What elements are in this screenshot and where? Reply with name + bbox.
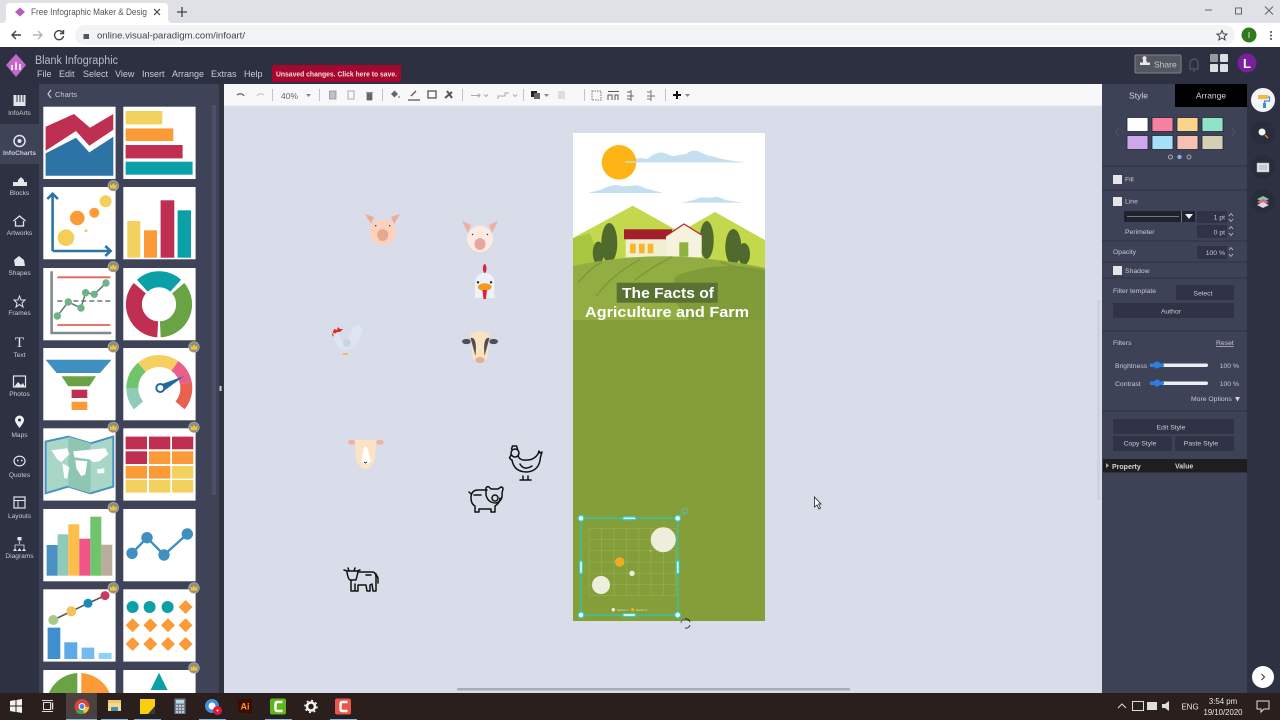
filter template controls: [1113, 285, 1234, 318]
filter sliders: [1113, 340, 1240, 403]
menu bar: [37, 69, 263, 79]
rail item: Frames: [8, 296, 31, 317]
right side rail: [1247, 84, 1280, 693]
style and arrange tabs: Style: [1129, 90, 1148, 100]
lock icon: [84, 34, 89, 39]
style tool button: [1251, 88, 1275, 112]
chart templates panel: [39, 84, 224, 706]
thumbnail: multicolour bars: [43, 509, 116, 581]
canvas background: [224, 106, 1102, 693]
taskbar: camtasia red: [335, 698, 351, 714]
browser address bar: [0, 23, 1280, 47]
title: The Facts of: [622, 285, 715, 302]
new tab button: [177, 7, 187, 17]
line control: Perimeter: [1125, 229, 1155, 236]
rail item: Blocks: Blocks: [10, 190, 30, 197]
rail item: Artworks: [7, 216, 33, 237]
url text: online.visual-paradigm.com/infoart/: [97, 30, 245, 40]
taskbar: settings: [305, 700, 317, 712]
icon: cow outline: [344, 568, 378, 591]
taskbar: vpn app: [205, 699, 222, 715]
rail item: Text: T: [15, 335, 24, 351]
style action buttons: Paste Style: [1184, 440, 1218, 448]
rail item: InfoCharts: [3, 136, 36, 157]
thumbnail: donut chart: [123, 268, 196, 340]
filter sliders: Contrast: [1115, 381, 1141, 388]
taskbar: sticky notes: [140, 699, 155, 714]
menu bar: File: [37, 69, 52, 79]
taskbar: illustrator: [238, 699, 252, 713]
rail item: Maps: [11, 416, 28, 439]
left icon rail: [0, 84, 39, 693]
premium crown badges: [108, 180, 199, 673]
filter sliders: Filters: [1113, 340, 1132, 347]
panel heading: Charts: [55, 90, 77, 99]
editor toolbar: [224, 84, 1102, 106]
thumbnail: gauge chart: [123, 348, 196, 420]
shadow control: [1113, 266, 1150, 275]
taskbar: task view: [42, 700, 53, 712]
bookmark star: [1217, 30, 1227, 40]
property table header: Value: [1175, 464, 1193, 470]
icon: rooster: [332, 325, 363, 354]
chart bubbles: [592, 527, 676, 594]
taskbar: calculator: [174, 698, 186, 714]
taskbar: camtasia green: [270, 698, 286, 714]
fill control: Fill: [1125, 176, 1134, 184]
rail item: Layouts: Layouts: [8, 513, 32, 520]
rail item: Diagrams: [5, 537, 34, 560]
collapse button: [1252, 666, 1274, 688]
chart legend: Series 1: [617, 608, 628, 612]
title: [585, 283, 749, 321]
line control: 0 pt: [1214, 230, 1225, 236]
icon: pig outline: [469, 487, 503, 512]
taskbar: open app indicators: [66, 718, 357, 720]
rail item: Quotes: [9, 456, 31, 479]
title: Agriculture and Farm: [585, 304, 749, 321]
document title: Blank Infographic: [35, 55, 118, 67]
add button: [673, 91, 681, 99]
shadow control: Shadow: [1125, 268, 1150, 275]
thumbnail: horizontal bars: [123, 107, 196, 179]
rail item: Text: Text: [13, 352, 26, 359]
back forward reload buttons: [12, 30, 64, 40]
style action buttons: [1113, 419, 1234, 451]
browser tab strip: [0, 0, 1280, 23]
thumbnail: line chart: [123, 509, 196, 581]
chart legend: Series 2: [636, 608, 647, 612]
canvas scrollbars: [457, 300, 1100, 690]
properties panel: [1102, 84, 1247, 693]
arrange icons: [531, 90, 655, 101]
fill control: [1113, 175, 1134, 184]
rail item: Quotes: Quotes: [9, 472, 31, 479]
system tray: 19/10/2020: [1203, 708, 1243, 717]
rail item: Photos: [9, 376, 30, 398]
thumbnail: scatter plot: [43, 187, 116, 259]
property table header: Property: [1112, 464, 1141, 471]
thumbnail: funnel chart: [43, 348, 116, 420]
apps grid: [1210, 54, 1228, 72]
share button: Share: [1154, 60, 1177, 70]
menu bar: Help: [244, 69, 263, 79]
app logo: [6, 54, 26, 77]
chart legend: [612, 608, 647, 612]
opacity control: 100 %: [1206, 250, 1225, 257]
windows taskbar: [0, 693, 1280, 720]
rail item: Frames: Frames: [8, 310, 31, 317]
search tool button: [1251, 121, 1275, 145]
thumbnail: column chart: [123, 187, 196, 259]
farmhouse: [624, 224, 702, 257]
filter sliders: More Options: [1191, 396, 1232, 403]
filter template controls: Select: [1194, 290, 1213, 298]
thumbnail: line over bars: [43, 589, 116, 662]
opacity control: [1113, 246, 1233, 259]
menu bar: Extras: [211, 69, 237, 79]
menu bar: Select: [83, 69, 109, 79]
chrome menu dots: [1270, 31, 1272, 40]
taskbar: file explorer: [108, 700, 121, 711]
selection box: [578, 508, 688, 618]
rail item: Photos: Photos: [9, 391, 30, 398]
user avatar: L: [1243, 56, 1251, 71]
thumbnail: area chart: [43, 107, 116, 179]
menu bar: Edit: [59, 69, 75, 79]
icon: chicken outline: [510, 446, 542, 480]
thumbnail: table heatmap: [123, 428, 196, 501]
filter sliders: 100 %: [1220, 381, 1239, 388]
notification bell: [1190, 59, 1198, 71]
line control: [1113, 197, 1233, 238]
menu bar: Insert: [142, 69, 165, 79]
style action buttons: Edit Style: [1157, 424, 1186, 432]
rail item: Shapes: Shapes: [8, 270, 31, 277]
icon: pig face: [365, 214, 400, 245]
style and arrange tabs: Arrange: [1196, 90, 1226, 100]
chart gridlines: [589, 528, 676, 596]
rail item: Blocks: [10, 177, 30, 197]
share button: [1135, 55, 1181, 73]
rail item: Text: [13, 335, 26, 359]
line control: Line: [1125, 198, 1138, 206]
style action buttons: Copy Style: [1124, 440, 1157, 448]
user avatar: [1238, 54, 1256, 72]
trees: [593, 221, 750, 265]
icon: sheep face: [348, 440, 384, 469]
connector icons: [471, 93, 517, 99]
zoom level: 40%: [281, 91, 298, 101]
rail item: Maps: Maps: [11, 432, 28, 439]
rail item: Layouts: [8, 497, 32, 520]
system tray: 3:54 pm: [1209, 697, 1237, 706]
colour swatches: [1127, 118, 1223, 150]
unsaved changes button: [272, 65, 401, 82]
browser tab: [2, 3, 172, 23]
window controls: [1205, 6, 1273, 14]
style icons: [391, 90, 452, 100]
profile avatar: [1242, 28, 1256, 42]
rail item: InfoArts: [8, 95, 32, 117]
profile avatar: I: [1248, 31, 1250, 40]
layers tool button: [1251, 189, 1275, 213]
browser tab: Free Infographic Maker & Desig: [31, 7, 147, 17]
filter sliders: Brightness: [1115, 363, 1148, 370]
page tool button: [1251, 155, 1275, 179]
swatch pager: [1116, 128, 1235, 159]
unsaved changes button: Unsaved changes. Click here to save.: [276, 70, 397, 78]
page and delete icons: [330, 91, 373, 100]
thumbnail: pictogram grid: [123, 589, 196, 662]
filter sliders: Reset: [1216, 340, 1234, 347]
menu bar: Arrange: [172, 69, 204, 79]
icon: pale pig face: [462, 221, 498, 252]
system tray: [1118, 697, 1269, 717]
rail item: InfoCharts: InfoCharts: [3, 150, 36, 157]
opacity control: Opacity: [1113, 249, 1137, 256]
thumbnail: pyramid chart: [123, 670, 196, 700]
icon: chicken face: [475, 264, 494, 299]
rail item: InfoArts: InfoArts: [8, 110, 32, 117]
mountains: [573, 206, 765, 280]
filter template controls: Author: [1161, 308, 1182, 316]
thumbnail: world map: [43, 428, 116, 501]
thumbnail: pie chart: [43, 670, 116, 706]
icon: mouse cursor: [814, 497, 821, 509]
style and arrange tabs: [1129, 84, 1247, 107]
taskbar: start button: [10, 699, 22, 713]
sun: [602, 145, 636, 180]
app header bar: [0, 47, 1280, 84]
taskbar: illustrator: Ai: [240, 702, 250, 712]
bubble chart: [589, 527, 676, 612]
filter template controls: Filter template: [1113, 288, 1156, 295]
clouds: [588, 151, 743, 203]
system tray: ENG: [1181, 702, 1199, 712]
line control: 1 pt: [1214, 214, 1225, 222]
taskbar: chrome: [66, 693, 97, 720]
menu bar: View: [115, 69, 135, 79]
property table header: [1103, 459, 1247, 472]
icon: cow face: [462, 331, 498, 363]
rail item: Artworks: Artworks: [7, 230, 33, 237]
rail item: Shapes: [8, 256, 31, 277]
rotate handle: [681, 619, 690, 628]
undo and redo: [237, 94, 264, 96]
thumbnail: control line chart: [43, 268, 116, 340]
hills: [573, 256, 765, 330]
page body: [573, 320, 765, 621]
infographic page: [573, 133, 765, 628]
rail item: Diagrams: Diagrams: [5, 553, 34, 560]
filter sliders: 100 %: [1220, 363, 1239, 370]
